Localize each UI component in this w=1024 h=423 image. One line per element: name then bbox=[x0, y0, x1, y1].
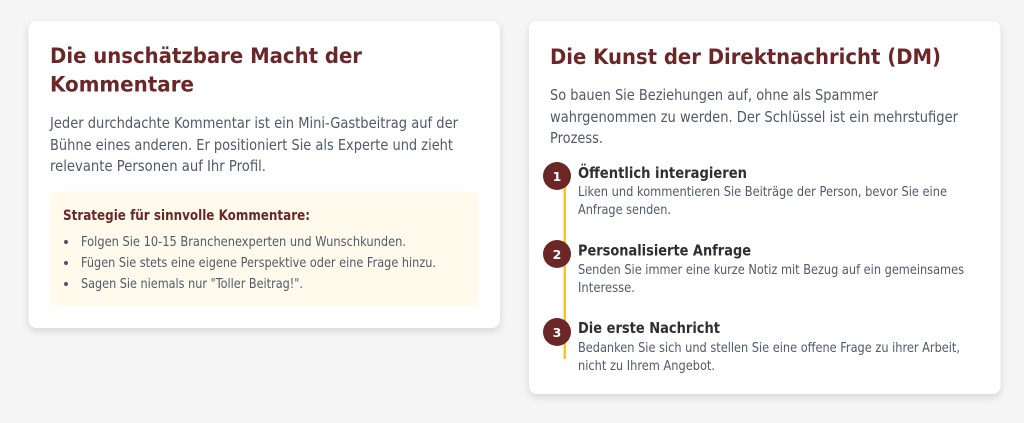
bullet list: Sagen Sie niemals nur "Toller Beitrag!". bbox=[81, 276, 303, 292]
step 1: Öffentlich interagieren bbox=[543, 162, 947, 218]
panel: Macht der Kommentare bbox=[28, 21, 500, 328]
step 3: Die erste Nachricht: Die erste Nachricht bbox=[578, 320, 720, 337]
icon: number 3: 3 bbox=[553, 325, 561, 340]
step 2: Personalisierte Anfrage: Interesse. bbox=[578, 280, 635, 296]
heading: Die Kunst der Direktnachricht (DM): Die Kunst der Direktnachricht (DM) bbox=[550, 45, 941, 70]
heading: Die unschätzbare Macht der Kommentare bbox=[50, 44, 362, 98]
heading: Die unschätzbare Macht der Kommentare: Kommentare bbox=[50, 72, 194, 98]
step 2: Personalisierte Anfrage bbox=[543, 240, 964, 296]
step 3: Die erste Nachricht: Bedanken Sie sich und stellen Sie eine offene Frage zu ihrer Arbeit, bbox=[578, 340, 960, 356]
text block: introduction to comments: Bühne eines anderen. Er positioniert Sie als Experte und zieht bbox=[50, 136, 453, 154]
text block: introduction to direct messages bbox=[550, 86, 959, 147]
heading: Die unschätzbare Macht der Kommentare: Die unschätzbare Macht der bbox=[50, 44, 362, 69]
icon: number 2: 2 bbox=[553, 247, 561, 262]
panel: Kunst der Direktnachricht bbox=[529, 21, 1000, 394]
timeline line bbox=[564, 176, 566, 359]
step 1: Öffentlich interagieren: Öffentlich interagieren bbox=[578, 164, 747, 182]
step 1: Öffentlich interagieren: Liken und kommentieren Sie Beiträge der Person, bevor Sie eine bbox=[578, 184, 947, 200]
step 2: Personalisierte Anfrage: Personalisierte Anfrage bbox=[578, 242, 751, 260]
icon: number 3 bbox=[543, 318, 571, 346]
text block: introduction to comments: Jeder durchdachte Kommentar ist ein Mini-Gastbeitrag auf der bbox=[49, 114, 459, 132]
step 3: Die erste Nachricht bbox=[543, 318, 960, 374]
callout heading: Strategie für sinnvolle Kommentare: bbox=[63, 207, 310, 224]
icon: number 2 bbox=[543, 240, 571, 268]
text block: introduction to direct messages: Prozess. bbox=[550, 129, 603, 147]
bullet list: Fügen Sie stets eine eigene Perspektive oder eine Frage hinzu. bbox=[81, 255, 436, 271]
text block: introduction to comments: relevante Personen auf Ihr Profil. bbox=[50, 157, 266, 175]
text block: introduction to direct messages: wahrgenommen zu werden. Der Schlüssel ist ein mehrstufiger bbox=[550, 108, 959, 126]
bullet list: Folgen Sie 10-15 Branchenexperten und Wunschkunden. bbox=[81, 234, 406, 250]
step 1: Öffentlich interagieren: Anfrage senden. bbox=[578, 202, 671, 218]
icon: number 1 bbox=[543, 162, 571, 190]
text block: introduction to direct messages: So bauen Sie Beziehungen auf, ohne als Spammer bbox=[550, 86, 879, 104]
bullet list bbox=[64, 234, 436, 292]
step 3: Die erste Nachricht: nicht zu Ihrem Angebot. bbox=[578, 358, 715, 374]
icon: number 1: 1 bbox=[553, 169, 561, 184]
callout: Strategie für sinnvolle Kommentare bbox=[50, 191, 479, 306]
text block: introduction to comments bbox=[49, 114, 459, 175]
